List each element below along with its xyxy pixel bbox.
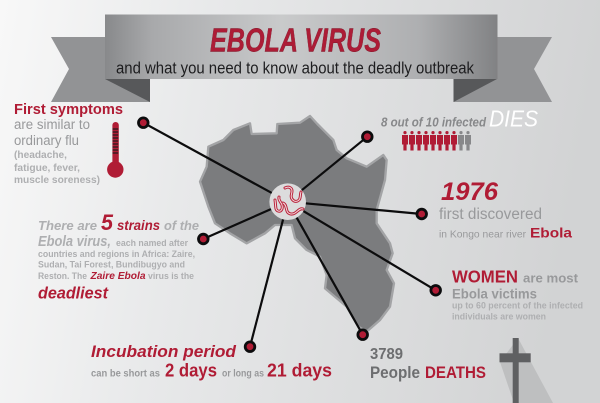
text block: incubation period: Incubation period <box>91 343 237 361</box>
text block: 8 out of 10: DIES <box>489 106 539 132</box>
text block: first symptoms: First symptoms <box>14 102 123 118</box>
text block: first symptoms: fatigue, fever, <box>14 163 80 174</box>
text block: deaths <box>370 346 486 382</box>
text block: 8 out of 10: 8 out of 10 infected <box>381 116 486 130</box>
people pictogram <box>402 131 471 150</box>
title: EBOLA VIRUS <box>210 22 381 58</box>
text block: incubation period: 2 days <box>165 360 217 380</box>
text block: five strains: deadliest <box>38 284 109 302</box>
text block: five strains: strains <box>117 218 160 233</box>
text block: 1976 discovery: first discovered <box>439 206 542 223</box>
text block: deaths: People <box>370 364 420 382</box>
text block: first symptoms: ordinary flu <box>14 133 79 148</box>
text block: first symptoms: (headache, <box>14 150 67 161</box>
text block: 1976 discovery: 1976 <box>441 178 499 206</box>
icon: thermometer <box>107 122 124 178</box>
text block: incubation period: can be short as <box>91 368 160 380</box>
text block: five strains: Sudan, Tai Forest, Bundibugyo and <box>38 260 185 270</box>
banner ribbon <box>51 14 552 102</box>
text block: 8 out of 10 <box>381 106 539 132</box>
text block: 1976 discovery: in Kongo near river <box>439 228 526 240</box>
text block: first symptoms: muscle soreness) <box>14 175 100 186</box>
text block: 1976 discovery <box>439 178 572 240</box>
text block: five strains: of the <box>164 218 199 233</box>
text block: first symptoms: are similar to <box>14 117 90 132</box>
text block: five strains: countries and regions in Africa: Zaire, <box>38 249 195 260</box>
text block: 1976 discovery: Ebola <box>530 224 572 240</box>
text block: incubation period <box>91 343 332 380</box>
text block: women <box>452 266 583 322</box>
text block: women: WOMEN <box>452 266 518 286</box>
text block: deaths: DEATHS <box>425 364 486 382</box>
text block: five strains: There are <box>38 218 97 233</box>
icon: cross with shadow <box>500 338 553 403</box>
text block: five strains: 5 <box>101 210 114 235</box>
connector lines and dots <box>138 118 441 352</box>
text block: women: are most <box>523 270 579 286</box>
text block: five strains: each named after <box>116 238 188 249</box>
text block: deaths: 3789 <box>370 346 403 363</box>
text block: incubation period: 21 days <box>267 360 332 380</box>
text block: first symptoms <box>14 102 123 186</box>
text block: five strains: Zaire Ebola <box>90 270 146 282</box>
map of Africa <box>200 116 394 332</box>
text block: women: individuals are women <box>452 312 546 322</box>
text block: incubation period: or long as <box>222 368 264 380</box>
text block: five strains: virus is the <box>148 271 194 282</box>
icon: virus hub <box>269 183 306 220</box>
text block: five strains: Ebola virus, <box>38 234 111 250</box>
subtitle: and what you need to know about the deadly outbreak <box>116 58 474 78</box>
text block: women: up to 60 percent of the infected <box>452 300 583 312</box>
text block: five strains: Reston. The <box>38 271 87 282</box>
text block: women: Ebola victims <box>452 286 537 302</box>
text block: five strains <box>38 210 199 302</box>
